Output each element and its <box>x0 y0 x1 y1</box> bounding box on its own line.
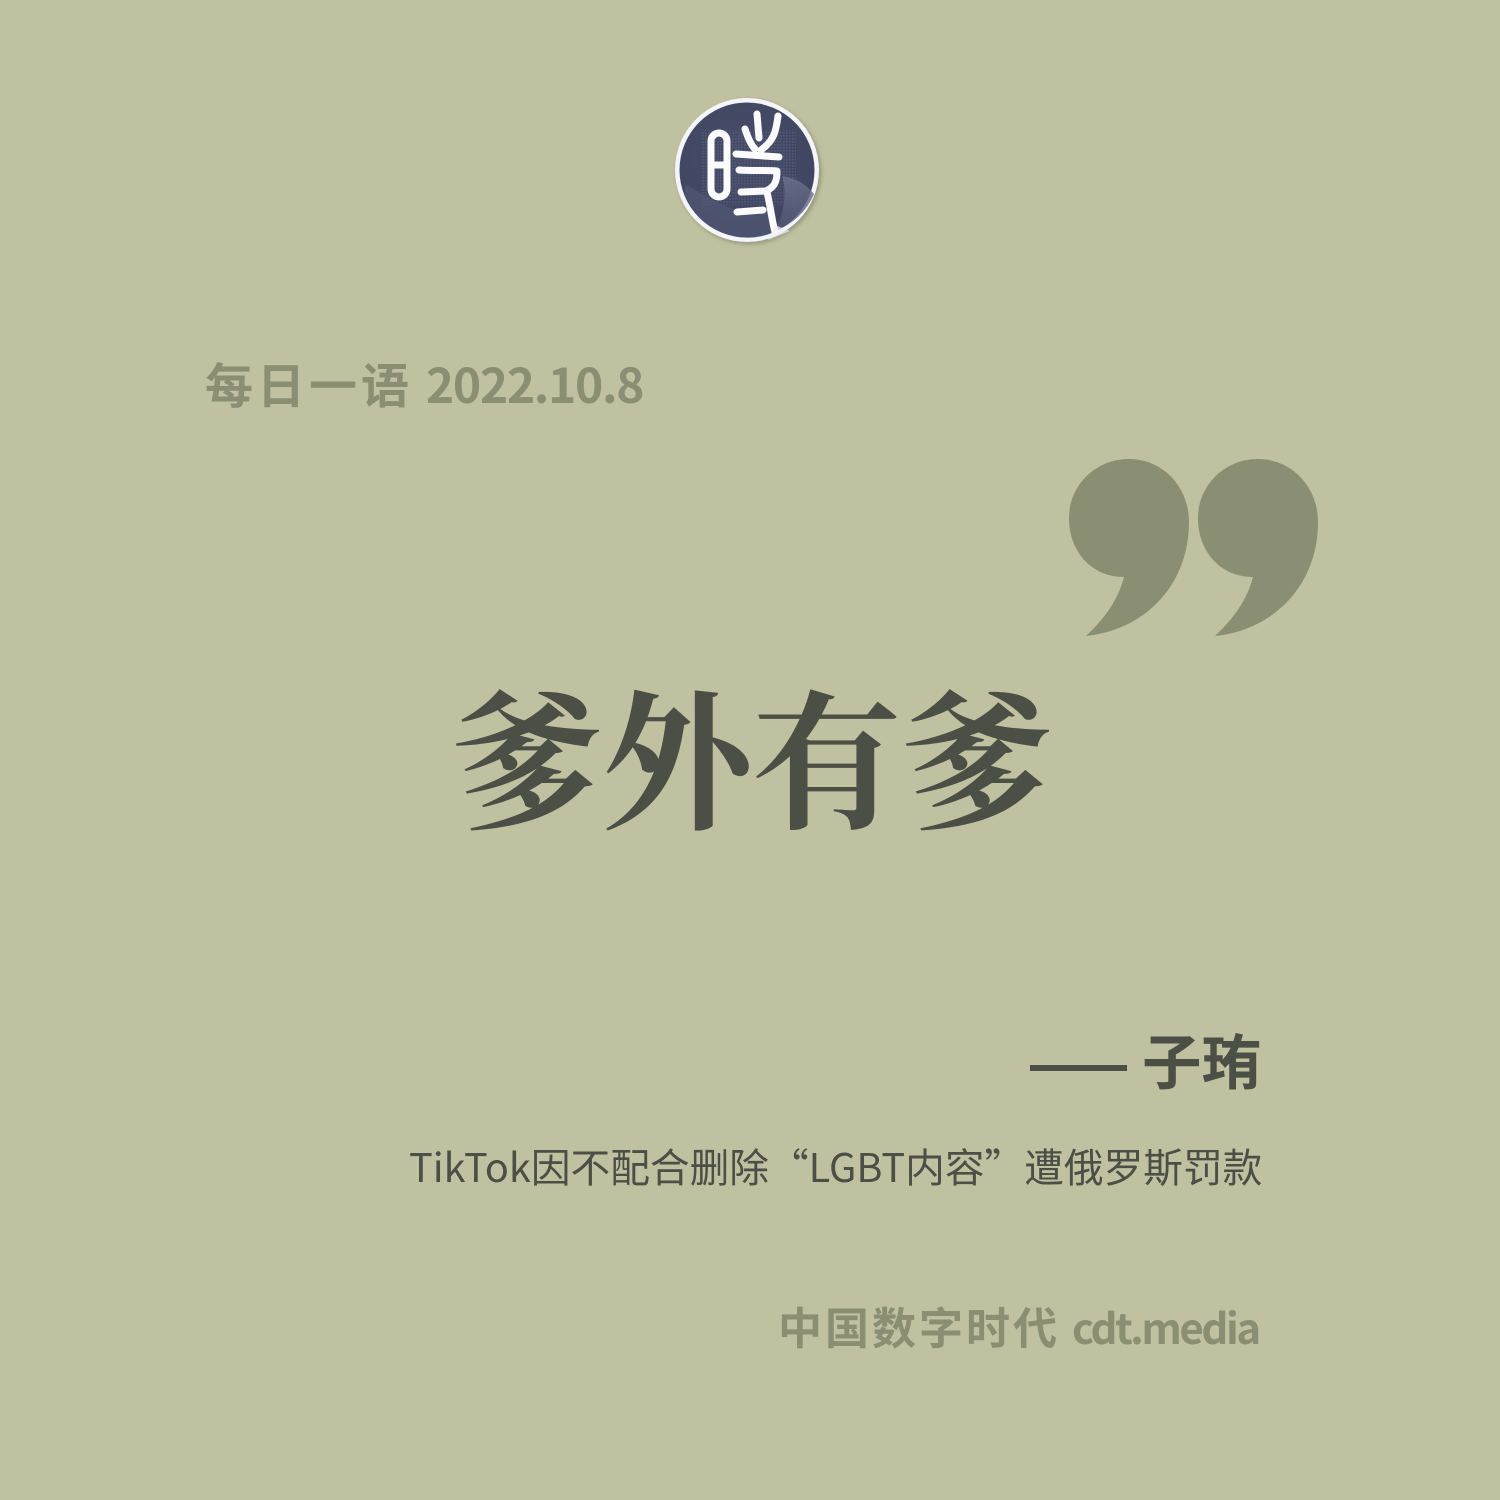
source headline: TikTok因不配合删除“LGBT内容”遭俄罗斯罚款 <box>409 1137 1262 1194</box>
icon: round seal logo <box>675 98 823 246</box>
attribution name: 子珛 <box>1142 1016 1261 1102</box>
attribution dash <box>1030 1065 1127 1071</box>
icon: closing quotation mark <box>1069 459 1318 636</box>
attribution <box>1030 1016 1261 1102</box>
quote title: 爹外有爹 <box>452 644 1052 860</box>
footer: site name: 中国数字时代 cdt.media <box>778 1293 1259 1357</box>
heading: date line: 每日一语 2022.10.8 <box>205 347 643 417</box>
